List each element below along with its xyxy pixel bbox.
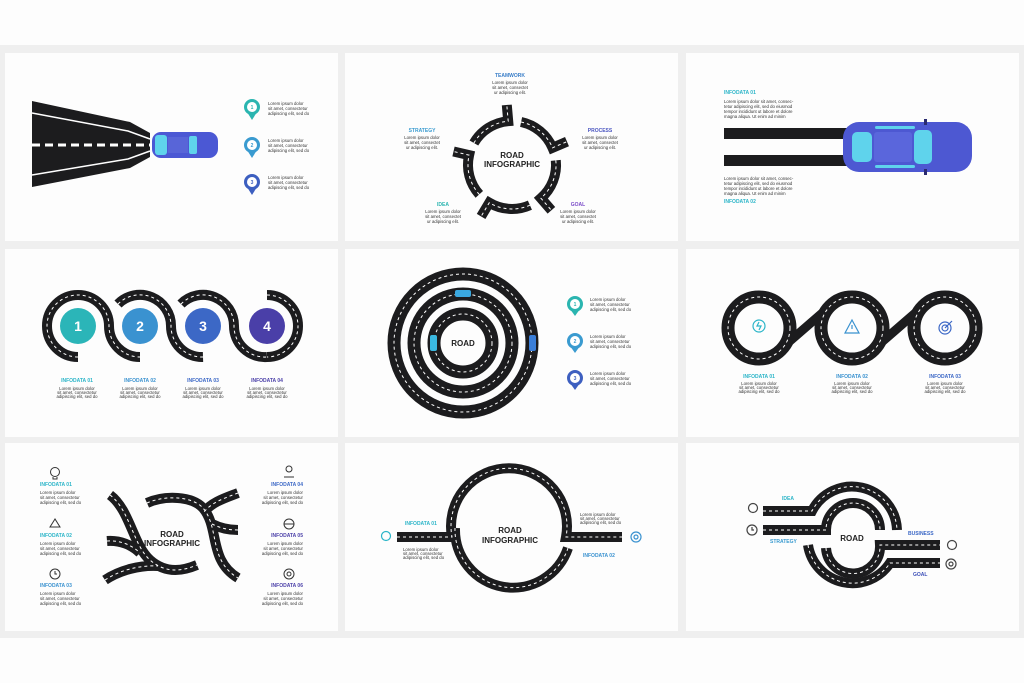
left items: adipiscing elit, sed do [40, 500, 82, 505]
center title: ROAD [160, 530, 184, 539]
labels: INFODATA 02 [836, 374, 868, 380]
info 02: INFODATA 02 [724, 199, 756, 205]
step circles: 4 [263, 318, 271, 334]
pins: Lorem ipsum dolor [590, 334, 626, 339]
right items: INFODATA 06 [271, 583, 303, 589]
label: strategy [404, 128, 441, 150]
label: idea: IDEA [437, 202, 449, 208]
left items: sit amet, consectetur [40, 546, 80, 551]
label: process: ur adipiscing elit. [584, 145, 616, 150]
step circles: 2 [136, 318, 144, 334]
pin list: sit amet, consectetur [268, 143, 308, 148]
step labels: Lorem ipsum dolor [122, 386, 158, 391]
car [152, 132, 218, 158]
step labels: INFODATA 01 [61, 378, 93, 384]
labels: INFODATA 01 [743, 374, 775, 380]
labels [738, 374, 966, 394]
info 02: Lorem ipsum dolor [580, 512, 616, 517]
label: strategy: ur adipiscing elit. [406, 145, 438, 150]
step labels: sit amet, consectetur [247, 390, 287, 395]
info 01 [403, 521, 445, 560]
step labels: sit amet, consectetur [183, 390, 223, 395]
center title: ROAD [500, 151, 524, 160]
labels: adipiscing elit, sed do [831, 389, 873, 394]
right items: sit amet, consectetur [263, 546, 304, 551]
label: idea [425, 202, 462, 224]
left items: sit amet, consectetur [40, 495, 80, 500]
pins: adipiscing elit, sed do [590, 344, 632, 349]
right items: sit amet, consectetur [263, 495, 304, 500]
label: idea: Lorem ipsum dolor [425, 209, 461, 214]
labels: Lorem ipsum dolor [741, 381, 777, 386]
step labels: adipiscing elit, sed do [246, 394, 288, 399]
center label: ROAD [451, 339, 475, 348]
step circles: 1 [74, 318, 82, 334]
right items: adipiscing elit, sed do [262, 500, 304, 505]
panel: concentric ring roads [345, 249, 678, 437]
left items: INFODATA 01 [40, 482, 72, 488]
pin list: 2 [251, 143, 254, 149]
label: process: PROCESS [588, 128, 613, 134]
tracks [724, 128, 850, 166]
panel: nested half loops [686, 443, 1019, 631]
center title: INFOGRAPHIC [482, 536, 538, 545]
info 01: INFODATA 01 [405, 521, 437, 527]
pins: adipiscing elit, sed do [590, 307, 632, 312]
pins: sit amet, consectetur [590, 339, 630, 344]
pin list: 3 [251, 180, 254, 186]
panel: road infographic ring [345, 53, 678, 241]
pin list: adipiscing elit, sed do [268, 148, 310, 153]
label: teamwork: ur adipiscing elit. [494, 90, 526, 95]
info 02: Lorem ipsum dolor sit amet, consec- [724, 176, 794, 181]
pins: sit amet, consectetur [590, 302, 630, 307]
info 02: INFODATA 02 [583, 553, 615, 559]
info 02 [724, 176, 794, 205]
right items: INFODATA 04 [271, 482, 303, 488]
step labels: sit amet, consectetur [120, 390, 160, 395]
label: teamwork: TEAMWORK [495, 73, 525, 79]
step labels: INFODATA 04 [251, 378, 283, 384]
pins: 2 [574, 339, 577, 345]
step labels: adipiscing elit, sed do [182, 394, 224, 399]
label: strategy: STRATEGY [409, 128, 436, 134]
left items: Lorem ipsum dolor [40, 541, 76, 546]
pins: adipiscing elit, sed do [590, 381, 632, 386]
label: teamwork: sit amet, consectet [492, 85, 529, 90]
info 02: tetur adipiscing elit, sed do eiusmod [724, 181, 793, 186]
label: process [582, 128, 619, 150]
info 01: sit amet, consectetur [403, 551, 443, 556]
panel: two tracks with car [686, 53, 1019, 241]
info 02: magna aliqua. Ut enim ad minim [724, 191, 786, 196]
info 01: Lorem ipsum dolor [403, 547, 439, 552]
step circles: 3 [199, 318, 207, 334]
left items: INFODATA 03 [40, 583, 72, 589]
pins: 1 [574, 302, 577, 308]
panel: circle with through road [345, 443, 678, 631]
info 01: tetur adipiscing elit, sed do eiusmod [724, 104, 793, 109]
info 01: adipiscing elit, sed do [403, 555, 445, 560]
pin list: adipiscing elit, sed do [268, 111, 310, 116]
label: process: sit amet, consectet [582, 140, 619, 145]
pin list: Lorem ipsum dolor [268, 138, 304, 143]
labels: Lorem ipsum dolor [834, 381, 870, 386]
info 01: tempor incididunt ut labore et dolore [724, 109, 793, 114]
pin list: Lorem ipsum dolor [268, 101, 304, 106]
label: teamwork [492, 73, 529, 95]
label: idea: sit amet, consectet [425, 214, 462, 219]
label: goal: Lorem ipsum dolor [560, 209, 596, 214]
center title: INFOGRAPHIC [484, 160, 540, 169]
left items: Lorem ipsum dolor [40, 591, 76, 596]
loop roads [728, 297, 976, 359]
pins: 3 [574, 376, 577, 382]
pin list: sit amet, consectetur [268, 106, 308, 111]
pins [567, 296, 632, 390]
info 01: Lorem ipsum dolor sit amet, consec- [724, 99, 794, 104]
info 01 [724, 90, 794, 119]
step labels: INFODATA 03 [187, 378, 219, 384]
icons [753, 320, 952, 334]
step labels: INFODATA 02 [124, 378, 156, 384]
panel: road with car [5, 53, 338, 241]
pin list: adipiscing elit, sed do [268, 185, 310, 190]
left items: sit amet, consectetur [40, 596, 80, 601]
labels: INFODATA 03 [929, 374, 961, 380]
center title: INFOGRAPHIC [144, 539, 200, 548]
info 02: tempor incididunt ut labore et dolore [724, 186, 793, 191]
pin list: Lorem ipsum dolor [268, 175, 304, 180]
labels: BUSINESS [908, 531, 934, 537]
labels: STRATEGY [770, 539, 798, 545]
rings [394, 274, 536, 412]
panel: branching roads [5, 443, 338, 631]
step labels: Lorem ipsum dolor [249, 386, 285, 391]
label: goal: sit amet, consectet [560, 214, 597, 219]
label: idea: ur adipiscing elit. [427, 219, 459, 224]
left items: Lorem ipsum dolor [40, 490, 76, 495]
right items: adipiscing elit, sed do [262, 551, 304, 556]
info 02: sit amet, consectetur [580, 516, 620, 521]
pins: sit amet, consectetur [590, 376, 630, 381]
left items: INFODATA 02 [40, 533, 72, 539]
info 02 [580, 512, 622, 559]
panel: three loops [686, 249, 1019, 437]
step circles [60, 308, 285, 344]
icons [382, 532, 641, 542]
right items: Lorem ipsum dolor [267, 541, 304, 546]
branching road network [105, 493, 238, 580]
info 01: INFODATA 01 [724, 90, 756, 96]
labels: sit amet, consectetur [832, 385, 872, 390]
right items: INFODATA 05 [271, 533, 303, 539]
step labels: Lorem ipsum dolor [185, 386, 221, 391]
right items [262, 482, 304, 606]
pin list: 1 [251, 105, 254, 111]
car [843, 119, 972, 175]
step labels: Lorem ipsum dolor [59, 386, 95, 391]
labels: adipiscing elit, sed do [738, 389, 780, 394]
step labels [56, 378, 288, 399]
label: process: Lorem ipsum dolor [582, 135, 618, 140]
labels: sit amet, consectetur [739, 385, 779, 390]
serpentine road [47, 295, 298, 357]
right items: Lorem ipsum dolor [267, 490, 304, 495]
pin list: sit amet, consectetur [268, 180, 308, 185]
icons [50, 466, 294, 579]
label: goal [560, 202, 597, 224]
center label: ROAD [840, 534, 864, 543]
road perspective [32, 101, 150, 187]
labels: sit amet, consectetur [925, 385, 965, 390]
label: strategy: sit amet, consectet [404, 140, 441, 145]
labels: Lorem ipsum dolor [927, 381, 963, 386]
label: strategy: Lorem ipsum dolor [404, 135, 440, 140]
left items: adipiscing elit, sed do [40, 551, 82, 556]
labels [770, 496, 934, 578]
step labels: sit amet, consectetur [57, 390, 97, 395]
label: goal: GOAL [571, 202, 585, 208]
pin list [244, 99, 310, 195]
label: teamwork: Lorem ipsum dolor [492, 80, 528, 85]
labels: adipiscing elit, sed do [924, 389, 966, 394]
step labels: adipiscing elit, sed do [119, 394, 161, 399]
info 01: magna aliqua. Ut enim ad minim [724, 114, 786, 119]
panel: four numbered steps [5, 249, 338, 437]
roads [763, 487, 940, 583]
labels: IDEA [782, 496, 794, 502]
pins: Lorem ipsum dolor [590, 297, 626, 302]
step labels: adipiscing elit, sed do [56, 394, 98, 399]
icons [747, 504, 956, 569]
labels: GOAL [913, 572, 927, 578]
label: goal: ur adipiscing elit. [562, 219, 594, 224]
right items: adipiscing elit, sed do [262, 601, 304, 606]
circle road [397, 468, 622, 588]
center title: ROAD [498, 526, 522, 535]
right items: Lorem ipsum dolor [267, 591, 304, 596]
info 02: adipiscing elit, sed do [580, 520, 622, 525]
ring road segments [454, 105, 567, 216]
pins: Lorem ipsum dolor [590, 371, 626, 376]
left items [40, 482, 82, 606]
right items: sit amet, consectetur [263, 596, 304, 601]
left items: adipiscing elit, sed do [40, 601, 82, 606]
